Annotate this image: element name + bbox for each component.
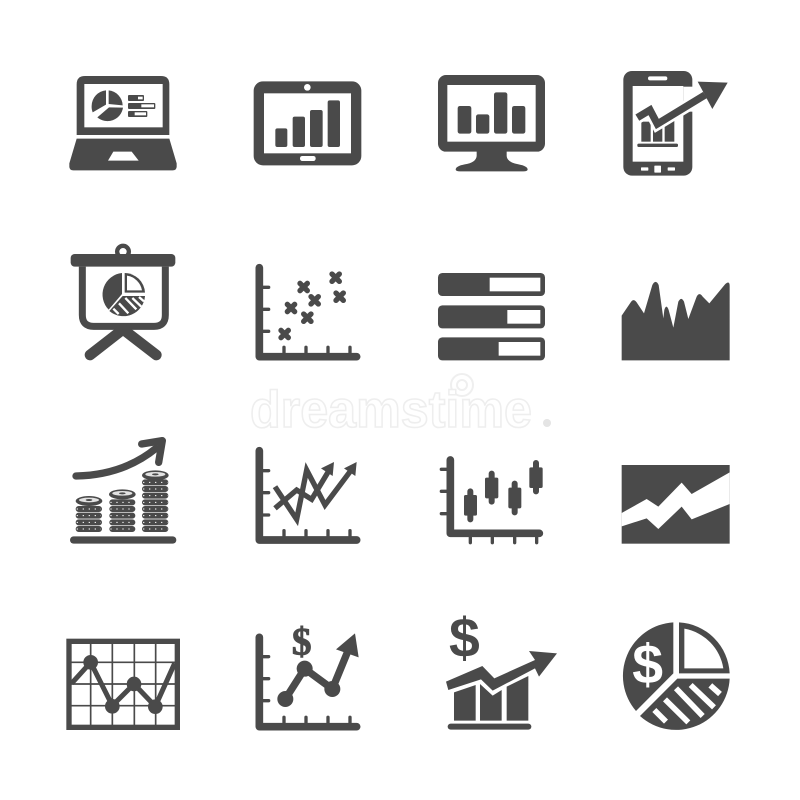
watermark: dreamstime — [250, 381, 532, 439]
dollar sign: $ — [292, 620, 312, 664]
icon: presentation board with pie chart — [71, 244, 175, 355]
icon: area chart with white trend band — [622, 465, 730, 544]
icon: two crossing trend lines — [259, 451, 357, 540]
icon: smartphone with rising arrow — [623, 71, 728, 176]
icon: desktop monitor with bar chart — [438, 75, 545, 171]
icon: scatter plot — [259, 268, 357, 357]
icon: dollar line chart with arrow — [259, 620, 359, 727]
icon: stacked progress bars — [438, 273, 545, 360]
icon: coin stacks with growth arrow — [74, 441, 173, 540]
icon: tablet with bar chart — [254, 81, 361, 165]
icon: candlestick chart — [441, 460, 543, 543]
icon: dollar bar chart with rising arrow — [446, 607, 557, 727]
dollar sign: $ — [449, 607, 480, 669]
icon: line chart on grid — [68, 640, 177, 727]
icon: area chart with spikes — [622, 282, 730, 360]
dollar sign: $ — [632, 633, 663, 695]
icon: laptop with pie chart — [69, 76, 177, 170]
icon: pie chart with dollar sign — [623, 622, 730, 730]
